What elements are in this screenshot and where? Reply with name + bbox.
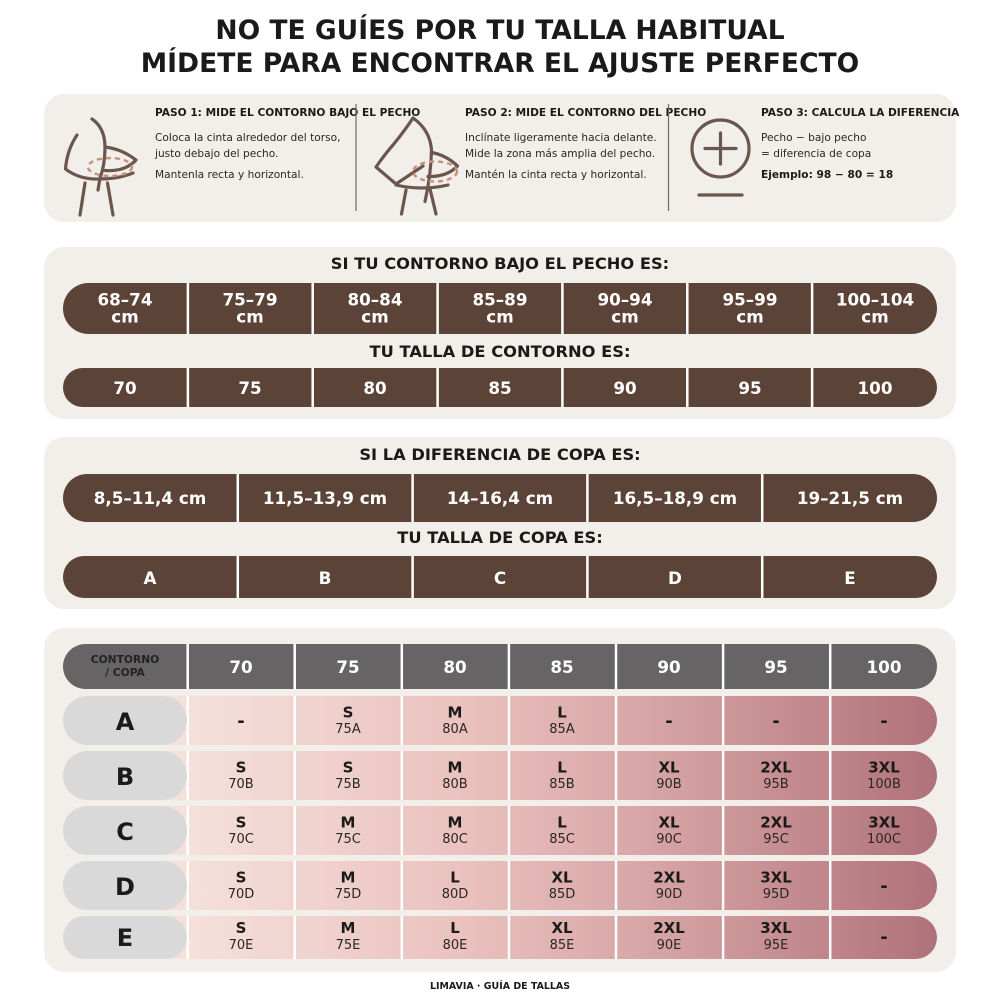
table row D: S [236,868,246,886]
cup difference row: 19–21,5 cm [797,488,903,508]
step 3 text: = diferencia de copa [761,148,871,160]
step 1 text: justo debajo del pecho. [154,148,278,160]
table row B: M [448,758,462,776]
table row D: 95D [763,887,789,902]
table row A: A [116,708,135,736]
step 2 text [465,107,706,181]
table row D: 70D [228,887,254,902]
table row C: M [448,814,462,832]
title: NO TE GUÍES POR TU TALLA HABITUAL [215,14,785,46]
table header row: 75 [336,657,360,677]
icon: underbust figure [66,119,136,215]
table row B: 85B [549,777,575,792]
underbust ranges row: 68–74 [98,290,152,310]
table row C: 90C [656,832,682,847]
table row E: E [117,924,133,952]
table header row: 80 [443,657,467,677]
table row D [63,861,937,910]
table row C [63,806,937,855]
band sizes row: 70 [113,378,137,398]
panel: band size [44,247,956,419]
panel: size table [44,628,956,972]
cup sizes row: B [319,568,331,588]
table row B: 80B [442,777,468,792]
table row E: 70E [229,938,253,953]
cup sizes row: C [494,568,506,588]
table row C: 85C [549,832,575,847]
table row B: 95B [763,777,789,792]
table row B: 2XL [760,758,792,776]
table row B: 3XL [868,758,900,776]
step 3 text: Ejemplo: 98 − 80 = 18 [761,169,893,181]
step 1 text: Mantenla recta y horizontal. [155,169,304,181]
table row A: S [343,704,353,722]
step 1 text [154,107,420,181]
heading: cup size: TU TALLA DE COPA ES: [397,528,603,547]
table row A: - [237,711,245,732]
table row B: 90B [656,777,682,792]
table header row: 95 [764,657,788,677]
underbust ranges row [63,283,937,334]
cup sizes row: D [668,568,682,588]
cup difference row: 8,5–11,4 cm [94,488,206,508]
title [141,14,859,79]
table row E: 80E [443,938,467,953]
table row E: 90E [657,938,681,953]
table row D: XL [551,868,573,886]
table row B: S [343,758,353,776]
table row A: L [557,704,567,722]
table row E: XL [551,919,573,937]
table header row: / COPA [105,666,146,679]
cup difference row: 11,5–13,9 cm [263,488,387,508]
table header row: 90 [657,657,681,677]
table row B: L [557,758,567,776]
panel: cup size [44,437,956,609]
band sizes row: 80 [363,378,387,398]
step 1 text: Coloca la cinta alrededor del torso, [155,132,340,144]
band sizes row: 95 [738,378,762,398]
heading: cup difference: SI LA DIFERENCIA DE COPA ES: [359,445,641,464]
table row D: 90D [656,887,682,902]
table row C: C [116,818,134,846]
table row A: - [880,711,888,732]
table row D: 3XL [760,868,792,886]
underbust ranges row: cm [111,306,139,326]
table row E [63,916,937,959]
table row C: XL [658,814,680,832]
band sizes row: 85 [488,378,512,398]
band sizes row [63,368,937,407]
underbust ranges row: cm [861,306,889,326]
underbust ranges row: 80–84 [348,290,402,310]
table row B: 70B [228,777,254,792]
cup sizes row: E [844,568,856,588]
table row E: 75E [336,938,360,953]
table header row: CONTORNO [91,653,159,666]
table row D: M [341,868,355,886]
band sizes row: 100 [858,378,892,398]
table row D: 2XL [653,868,685,886]
table row C: L [557,814,567,832]
table row A [63,696,937,745]
cup sizes row: A [144,568,157,588]
table row E: 2XL [653,919,685,937]
underbust ranges row: 85–89 [472,290,528,310]
underbust ranges row: 75–79 [222,290,278,310]
underbust ranges row: cm [486,306,514,326]
table row B: XL [658,758,680,776]
step 3 text: Pecho − bajo pecho [761,132,866,144]
underbust ranges row: 95–99 [722,290,778,310]
table row B [63,751,937,800]
table row E: 85E [550,938,574,953]
table header row: 70 [229,657,253,677]
table row D: D [115,873,135,901]
table header row: 100 [867,657,901,677]
table row A: 80A [442,722,468,737]
step 3 text [761,107,960,181]
table row A: - [772,711,780,732]
table row B: S [236,758,246,776]
underbust ranges row: cm [361,306,389,326]
table row C: 3XL [868,814,900,832]
table row E: L [450,919,460,937]
underbust ranges row: cm [736,306,764,326]
band sizes row: 75 [238,378,262,398]
table row C: 75C [335,832,361,847]
heading: band size: TU TALLA DE CONTORNO ES: [370,342,630,361]
panel: measuring steps [44,94,960,222]
step 2 text: PASO 2: MIDE EL CONTORNO DEL PECHO [465,107,706,119]
table row C: 100C [867,832,901,847]
footer: LIMAVIA · GUÍA DE TALLAS [430,980,570,992]
step 1 text: PASO 1: MIDE EL CONTORNO BAJO EL PECHO [155,107,420,119]
table row C: M [341,814,355,832]
table row C: 80C [442,832,468,847]
step 3 text: PASO 3: CALCULA LA DIFERENCIA [761,107,960,119]
table row E: M [341,919,355,937]
table row E: S [236,919,246,937]
table row E: - [880,927,888,948]
table row A: - [665,711,673,732]
table row A: 75A [335,722,361,737]
table row D: 75D [335,887,361,902]
table row C: 95C [763,832,789,847]
cup sizes row [63,556,937,598]
icon: full bust figure [376,118,458,214]
table row D: 80D [442,887,468,902]
table row A: M [448,704,462,722]
title: MÍDETE PARA ENCONTRAR EL AJUSTE PERFECTO [141,47,859,79]
cup difference row [63,474,937,522]
table row D: 85D [549,887,575,902]
table header row [63,644,937,689]
underbust ranges row: 100–104 [836,290,914,310]
cup difference row: 16,5–18,9 cm [613,488,737,508]
table row B: 75B [335,777,361,792]
icon: plus and minus [692,120,749,195]
table row C: 70C [228,832,254,847]
table row D: L [450,868,460,886]
table row E: 95E [764,938,788,953]
table row D: - [880,876,888,897]
table header row: 85 [550,657,574,677]
table row B: 100B [867,777,901,792]
table row C: 2XL [760,814,792,832]
table row C: S [236,814,246,832]
table row B: B [116,763,134,791]
underbust ranges row: 90–94 [598,290,652,310]
step 2 text: Mantén la cinta recta y horizontal. [465,169,647,181]
underbust ranges row: cm [236,306,264,326]
step 2 text: Inclínate ligeramente hacia delante. [465,132,657,144]
cup difference row: 14–16,4 cm [447,488,553,508]
underbust ranges row: cm [611,306,639,326]
table row A: 85A [549,722,575,737]
heading: underbust: SI TU CONTORNO BAJO EL PECHO ES: [331,254,669,273]
table row E: 3XL [760,919,792,937]
band sizes row: 90 [613,378,637,398]
step 2 text: Mide la zona más amplia del pecho. [465,148,655,160]
